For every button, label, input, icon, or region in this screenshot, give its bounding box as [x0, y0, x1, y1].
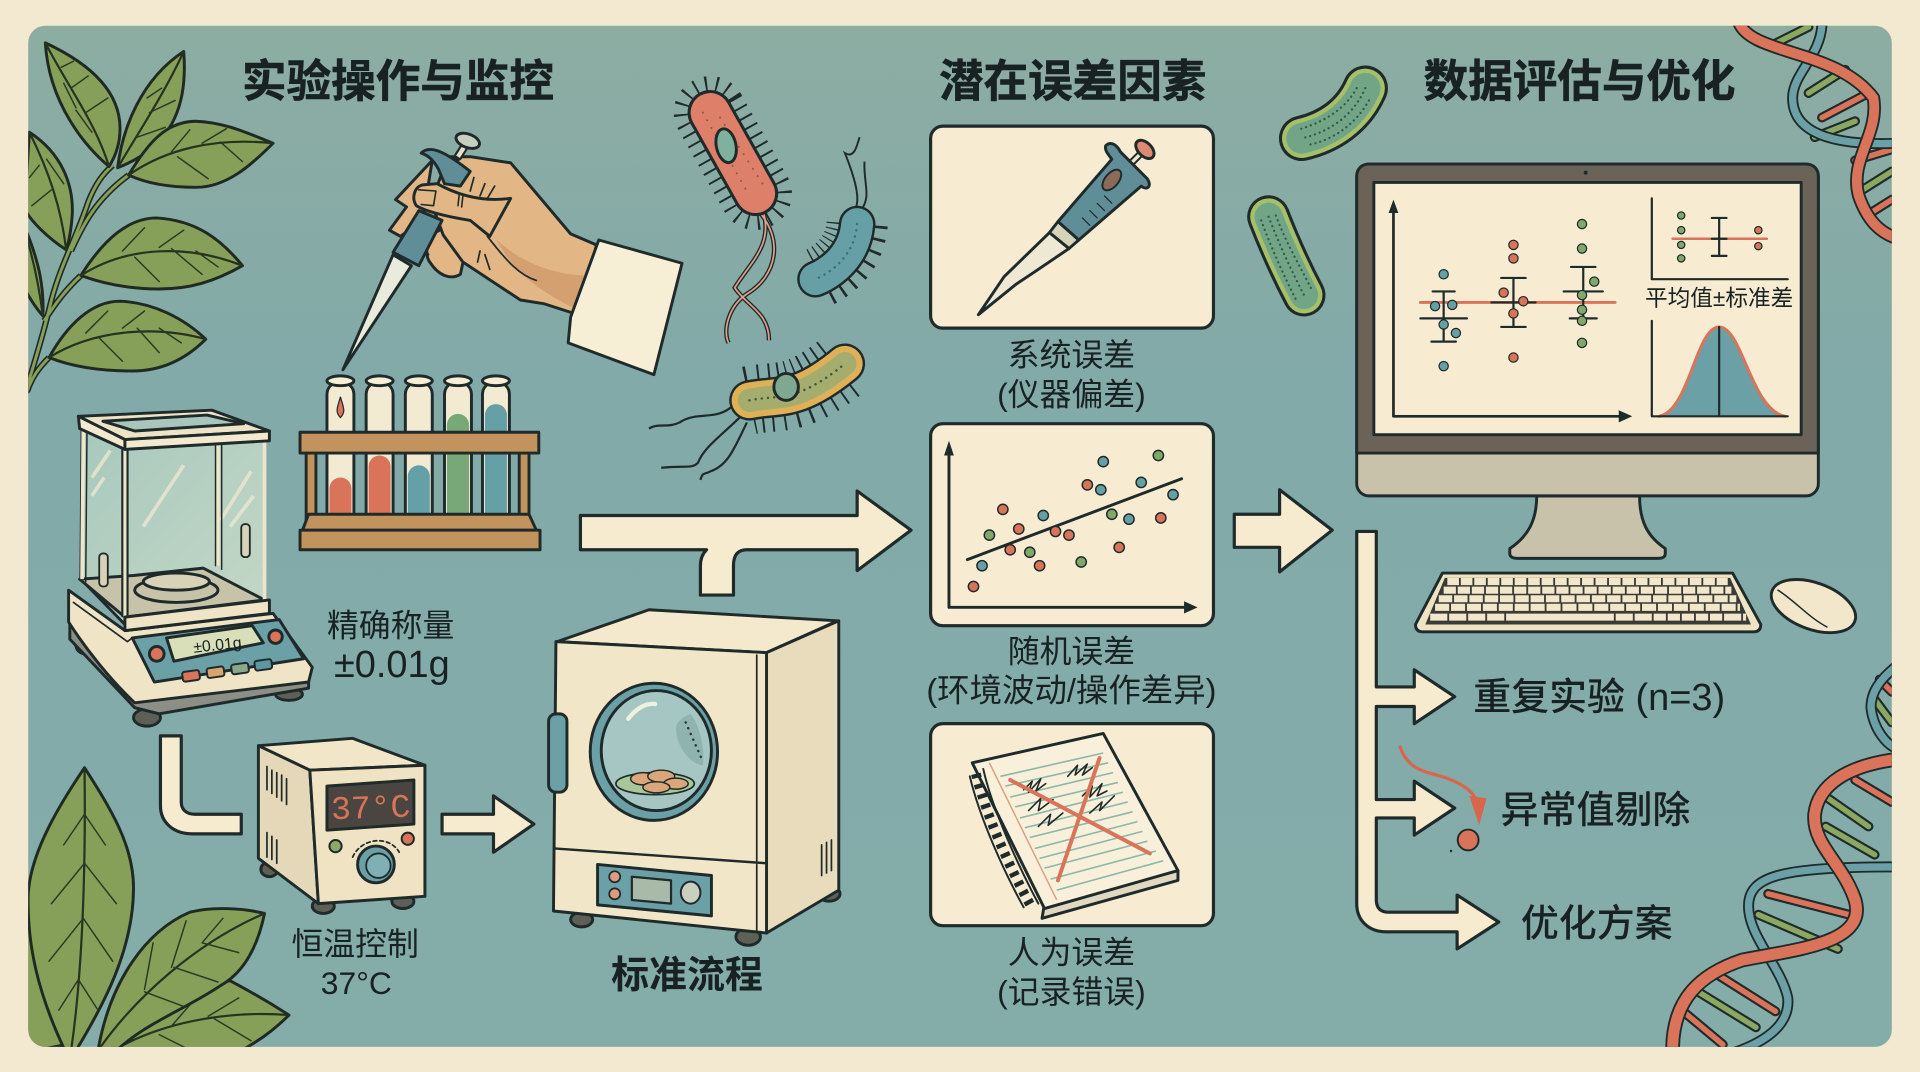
- icon: outlier removal arrow: [1400, 746, 1487, 852]
- icon: bottom-right DNA helix: [1673, 665, 1898, 1053]
- panel: systematic error: [931, 126, 1213, 328]
- label: 随机误差: (环境波动/操作差异): [926, 673, 1216, 709]
- label: 重复实验 (n=3): 重复实验 (n=3): [1473, 677, 1725, 719]
- label: 精确称量: [327, 608, 454, 686]
- label: 系统误差: 系统误差: [1008, 337, 1135, 373]
- panel: random error: [931, 424, 1213, 626]
- icon: top-left plant: [25, 43, 273, 395]
- icon: bacterium coral: [673, 75, 793, 343]
- arrow: to data evaluation: [1234, 490, 1332, 572]
- icon: green bacillus lower: [1261, 216, 1313, 299]
- arrow: temperature control to incubator: [442, 796, 534, 852]
- icon: computer monitor: [1357, 164, 1818, 558]
- arrow: to error factors: [580, 491, 911, 595]
- label: 人为误差: (记录错误): [997, 974, 1146, 1010]
- icon: hand with pipette: [343, 130, 682, 375]
- label: 人为误差: [997, 935, 1146, 1010]
- icon: temperature controller: [258, 738, 425, 913]
- monitor stand: [1510, 496, 1665, 558]
- label: 恒温控制: 37°C: [321, 965, 392, 1001]
- label: 系统误差: [997, 337, 1146, 412]
- chart: scatter plot: [944, 441, 1198, 613]
- title: 实验操作与监控: 实验操作与监控: [242, 58, 554, 107]
- label: 精确称量: ±0.01g: [334, 644, 450, 686]
- label: 恒温控制: 恒温控制: [291, 926, 419, 962]
- icon: test tube rack: [300, 376, 540, 550]
- icon: bacterium yellow: [649, 364, 845, 480]
- icon: incubator: [549, 610, 840, 945]
- icon: analytical balance: [69, 410, 312, 726]
- icon: bacterium teal: [816, 137, 867, 279]
- arrow: branching to three outcomes: [1357, 531, 1499, 949]
- label: 系统误差: (仪器偏差): [997, 376, 1146, 412]
- label: 随机误差: 随机误差: [1008, 633, 1135, 669]
- icon: bottom-left plant: [25, 768, 289, 1065]
- panel: human error: [931, 724, 1213, 926]
- icon: top-right DNA helix: [1739, 22, 1898, 239]
- icon: keyboard: [1415, 573, 1761, 632]
- label: 平均值±标准差: 平均值±标准差: [1645, 285, 1793, 311]
- chart: mean with error bars: [1389, 200, 1632, 422]
- reading: ±0.01g: ±0.01g: [192, 635, 243, 657]
- label: 随机误差: [926, 633, 1216, 709]
- chart: normal curve: [1652, 321, 1788, 416]
- chart: inset mean: [1652, 198, 1788, 279]
- arrow: from balance to temperature control: [160, 736, 241, 834]
- label: 精确称量: 精确称量: [327, 608, 454, 644]
- label: 标准流程: 标准流程: [611, 955, 763, 997]
- icon: pipette: [978, 137, 1157, 315]
- display: 37°C: 37°C: [330, 789, 411, 829]
- title: 潜在误差因素: 潜在误差因素: [939, 58, 1206, 107]
- label: 恒温控制: [291, 926, 419, 1001]
- label: 异常值剔除: 异常值剔除: [1501, 790, 1690, 832]
- title: 数据评估与优化: 数据评估与优化: [1424, 58, 1735, 107]
- icon: notebook with cross: [970, 733, 1178, 918]
- icon: green bacillus top: [1298, 88, 1369, 144]
- label: 人为误差: 人为误差: [1008, 935, 1135, 971]
- label: 优化方案: 优化方案: [1521, 904, 1673, 946]
- icon: mouse: [1764, 569, 1863, 643]
